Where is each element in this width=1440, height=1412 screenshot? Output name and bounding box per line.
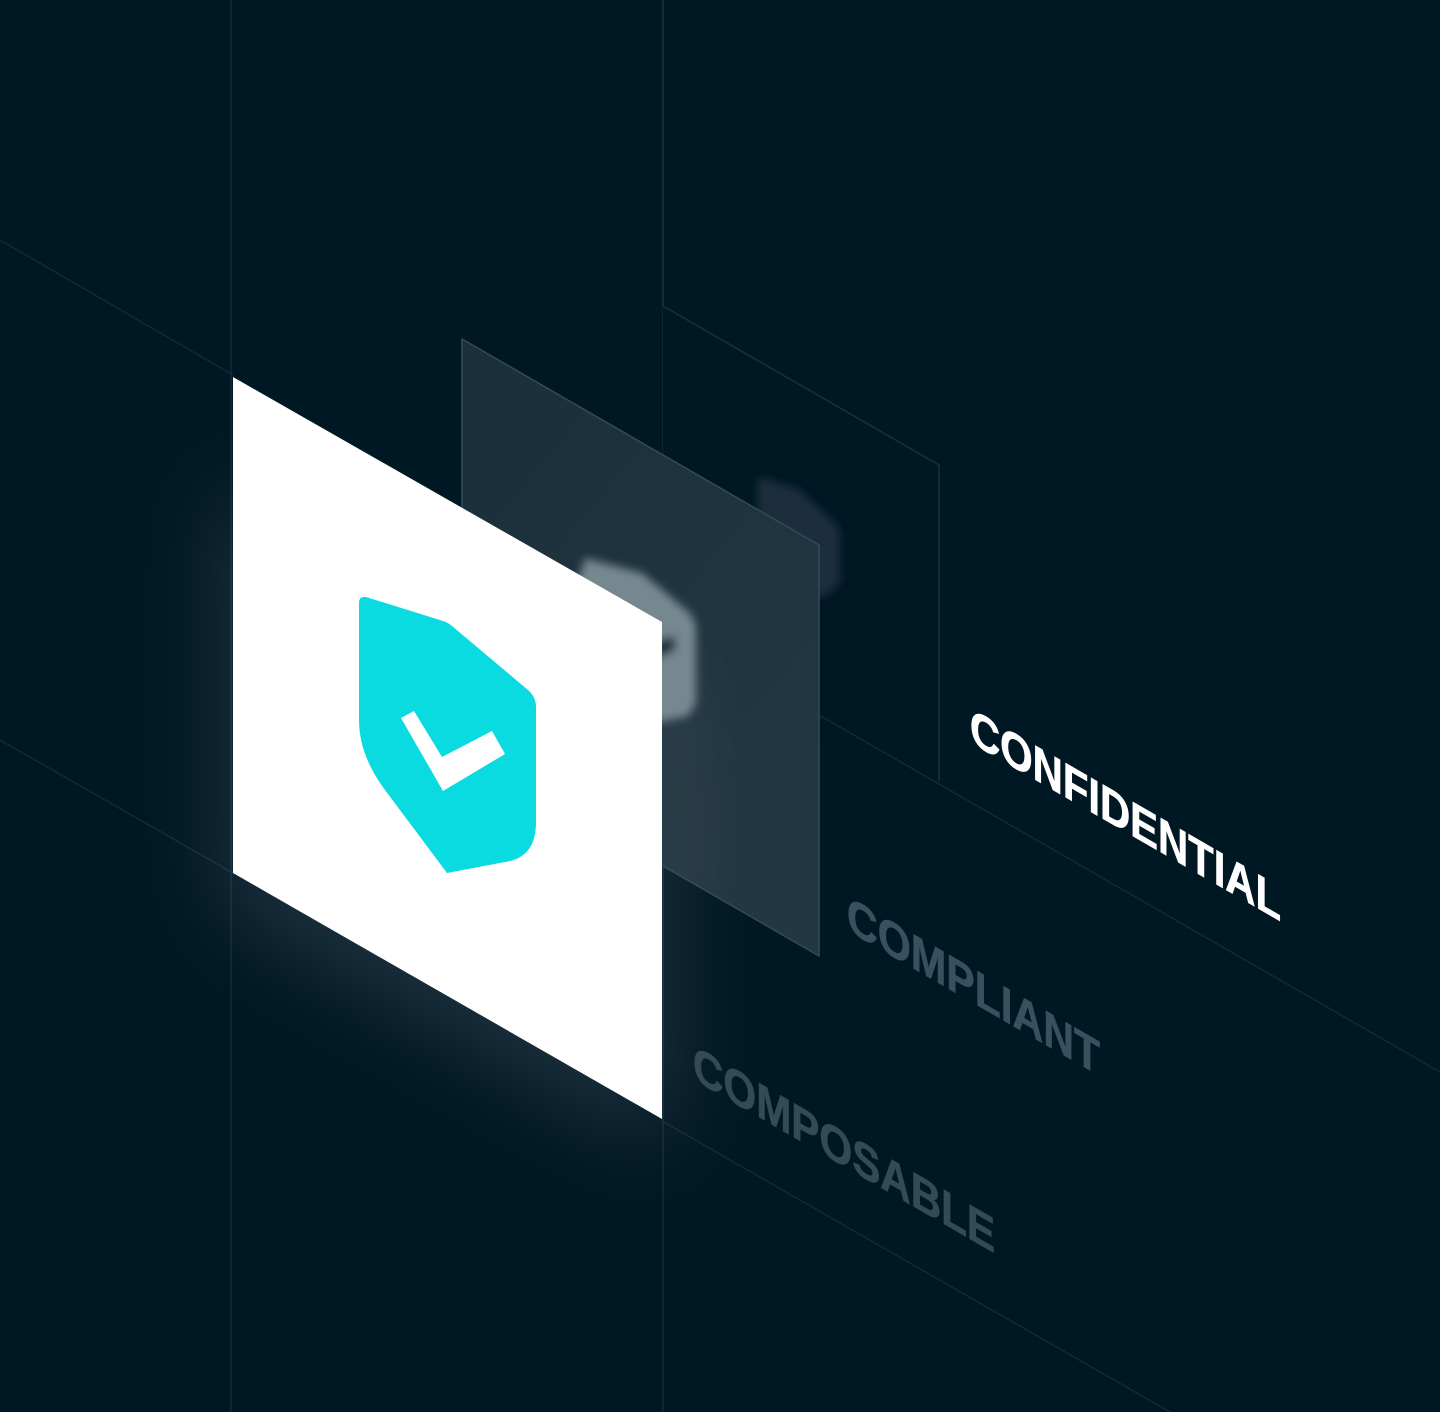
- icon: cyan shield: [359, 597, 536, 873]
- glow around front panel: [225, 480, 670, 1150]
- glass inner glow: [575, 554, 703, 730]
- label: confidential: CONFIDENTIAL: [970, 699, 1281, 933]
- label: compliant: COMPLIANT: [847, 887, 1100, 1087]
- icon: check mark: [401, 711, 505, 791]
- middle layer panel: compliant glass: [462, 339, 819, 970]
- front layer panel: white: [233, 377, 662, 1119]
- label: composable: COMPOSABLE: [693, 1036, 995, 1264]
- back layer panel: confidential: [663, 0, 939, 781]
- icon: blurred back shield: [758, 477, 840, 598]
- icon: blurred middle shield: [560, 558, 696, 722]
